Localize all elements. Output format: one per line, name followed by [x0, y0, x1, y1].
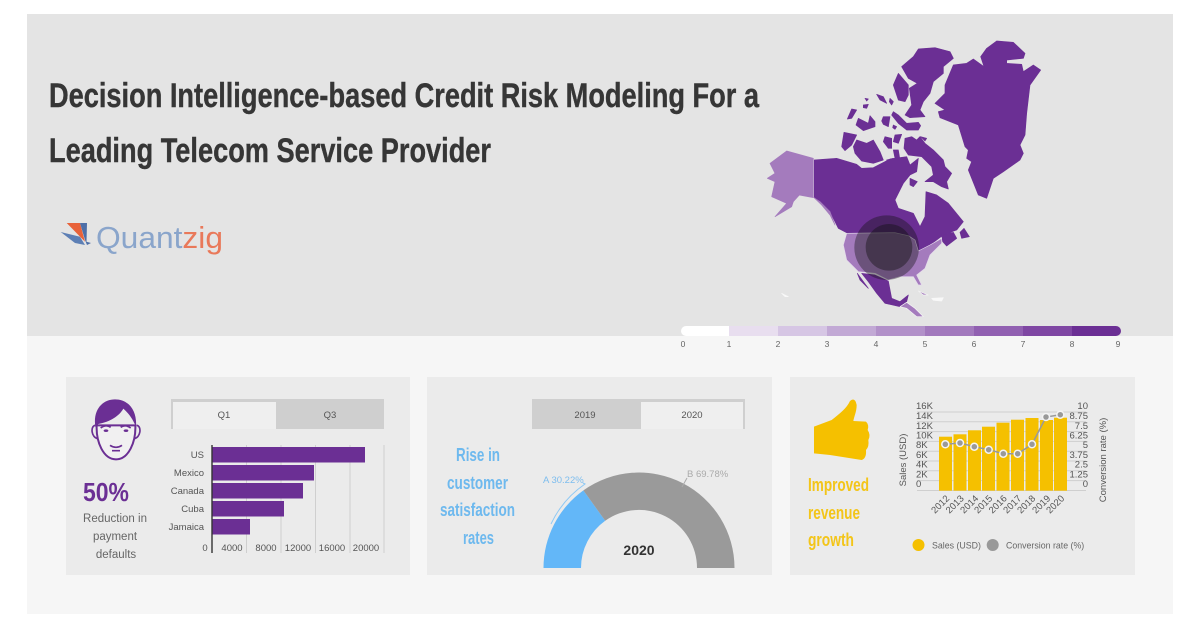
map: Canada [814, 157, 969, 251]
map: Greenland and Arctic islands [842, 41, 1041, 198]
map of North America [767, 41, 1041, 317]
combo chart: sales and conversion rate: 2019 [1030, 493, 1053, 516]
title [49, 77, 760, 170]
combo chart: sales and conversion rate [898, 401, 1109, 516]
logo: Quantzig: Quantzig [96, 220, 223, 255]
bar chart: countries: US [191, 450, 204, 461]
tabs: 2019 and 2020: 2020 [681, 410, 703, 421]
text: reduction in payment defaults: Reduction in [83, 513, 147, 525]
tabs: Q1 and Q3: Q1 [218, 410, 230, 421]
combo chart: sales and conversion rate: 8K [916, 440, 928, 451]
gauge chart: 2020 [623, 542, 655, 558]
combo chart: sales and conversion rate: 2017 [1001, 493, 1024, 516]
bar chart: countries: 0 [202, 543, 208, 554]
combo chart: sales and conversion rate: 2K [916, 470, 928, 480]
combo chart: sales and conversion rate: 12K [916, 421, 934, 432]
tabs: 2019 and 2020: 2019 [574, 410, 596, 421]
map legend scale: 1 [727, 339, 732, 349]
gauge chart [543, 469, 734, 568]
text: reduction in payment defaults: payment [93, 531, 138, 543]
combo chart: sales and conversion rate: 3.75 [1070, 450, 1088, 461]
map: United States [843, 233, 942, 285]
text: rise in customer satisfaction rates: satisfaction [440, 500, 515, 520]
map: Alaska [767, 151, 813, 217]
combo chart: sales and conversion rate: 7.5 [1075, 421, 1088, 432]
text: improved revenue growth: revenue [808, 503, 860, 523]
map: Alaska panhandle [814, 198, 835, 225]
combo chart: sales and conversion rate: 2016 [987, 493, 1010, 516]
bar chart: countries: 12000 [285, 543, 311, 554]
map legend scale: 7 [1021, 339, 1026, 349]
text: rise in customer satisfaction rates: customer [447, 473, 508, 493]
combo chart: sales and conversion rate: 2020 [1044, 493, 1067, 516]
combo chart: sales and conversion rate: 6.25 [1070, 430, 1088, 442]
combo chart: sales and conversion rate: 5 [1083, 440, 1088, 451]
text: improved revenue growth: growth [808, 530, 854, 550]
combo chart: sales and conversion rate: 10K [916, 430, 934, 442]
map legend scale: 3 [825, 339, 830, 349]
combo chart: sales and conversion rate: 0 [916, 479, 921, 490]
bar chart: countries: Cuba [181, 504, 205, 515]
bar chart: countries: 16000 [319, 543, 345, 554]
bar chart: countries: 8000 [255, 543, 277, 554]
map legend scale: 8 [1070, 339, 1075, 349]
tabs: Q1 and Q3 [171, 399, 384, 429]
bar chart: countries: Canada [171, 486, 205, 497]
panel: customer satisfaction [427, 377, 772, 575]
map legend scale: 0 [681, 339, 686, 349]
gauge chart: A 30.22% [543, 475, 584, 486]
title: Decision Intelligence-based Credit Risk Modeling For a [49, 77, 760, 115]
text: improved revenue growth [808, 475, 869, 550]
bar chart: countries: 4000 [221, 543, 243, 554]
tabs: 2019 and 2020 [532, 399, 745, 429]
chart legend: Sales (USD) [932, 540, 981, 550]
map: highlight circles [854, 215, 919, 280]
combo chart: sales and conversion rate: 16K [916, 401, 934, 412]
gauge chart: B 69.78% [687, 469, 729, 480]
bar chart: countries: Jamaica [169, 522, 205, 533]
text: rise in customer satisfaction rates: rates [463, 528, 494, 548]
header panel [27, 14, 1173, 336]
combo chart: sales and conversion rate: Conversion rate (%) [1098, 418, 1109, 502]
combo chart: sales and conversion rate: 10 [1077, 401, 1088, 412]
text: reduction in payment defaults [83, 513, 147, 561]
combo chart: sales and conversion rate: 6K [916, 450, 928, 461]
chart legend: Conversion rate (%) [1006, 540, 1084, 550]
icon: face [92, 399, 140, 459]
text: reduction in payment defaults: defaults [96, 549, 136, 561]
combo chart: sales and conversion rate: 14K [916, 411, 934, 422]
tabs: Q1 and Q3: Q3 [324, 410, 336, 421]
panel: payment defaults [66, 377, 410, 575]
text: improved revenue growth: Improved [808, 475, 869, 495]
map: Mexico [857, 273, 908, 307]
text: rise in customer satisfaction rates [440, 445, 515, 548]
title: Leading Telecom Service Provider [49, 132, 491, 170]
bar chart: countries [169, 445, 384, 554]
combo chart: sales and conversion rate: 2015 [972, 493, 995, 516]
bar chart: countries: Mexico [174, 468, 204, 479]
combo chart: sales and conversion rate: 2.5 [1075, 460, 1088, 470]
stat: 50%: 50% [83, 477, 129, 507]
map legend scale: 9 [1116, 339, 1121, 349]
text: rise in customer satisfaction rates: Rise in [456, 445, 500, 465]
combo chart: sales and conversion rate: 1.25 [1070, 470, 1088, 480]
map legend scale: 5 [923, 339, 928, 349]
combo chart: sales and conversion rate: 2018 [1015, 493, 1038, 516]
combo chart: sales and conversion rate: 2013 [944, 493, 967, 516]
map: Central America and Caribbean [900, 291, 928, 317]
map: small white islands [782, 293, 943, 301]
map legend scale: 4 [874, 339, 879, 349]
bar chart: countries: 20000 [353, 543, 379, 554]
map legend scale: 2 [776, 339, 781, 349]
icon: thumbs up [814, 400, 870, 460]
combo chart: sales and conversion rate: 8.75 [1070, 411, 1088, 422]
panel: revenue growth [790, 377, 1135, 575]
combo chart: sales and conversion rate: 4K [916, 460, 928, 470]
map legend scale: 6 [972, 339, 977, 349]
combo chart: sales and conversion rate: 2014 [958, 493, 981, 516]
combo chart: sales and conversion rate: 2012 [929, 493, 952, 516]
map legend scale [681, 326, 1121, 349]
combo chart: sales and conversion rate: Sales (USD) [898, 434, 909, 486]
combo chart: sales and conversion rate: 0 [1083, 479, 1088, 490]
chart legend [912, 539, 1084, 551]
